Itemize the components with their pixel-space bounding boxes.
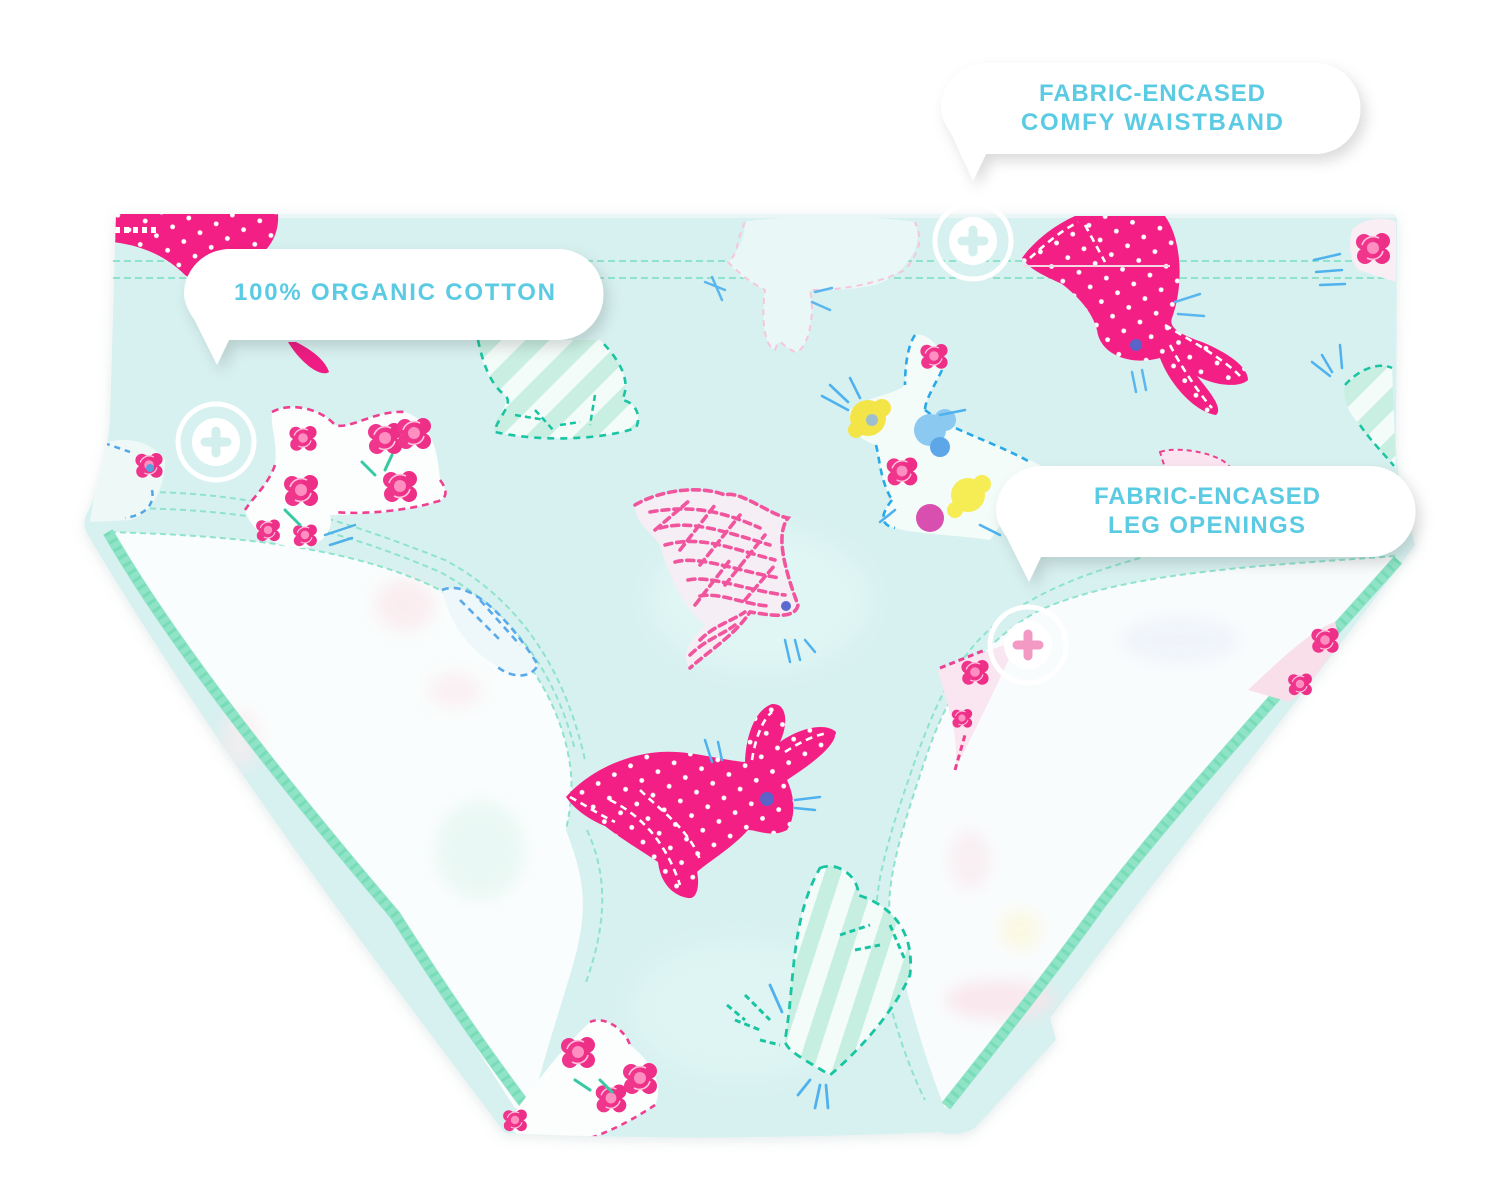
- seam texture: [108, 532, 1398, 1106]
- bunny: floral pink, inside right leg: [938, 640, 1018, 770]
- callout: fabric-encased leg openings: FABRIC-ENCASED: [1094, 483, 1320, 510]
- bunny: pink, right seam: [1248, 622, 1340, 702]
- garment base fabric: [84, 214, 1415, 1137]
- bunny: leopard, centre: [635, 490, 815, 668]
- bunny: floral, left centre: [245, 407, 445, 548]
- callout: fabric-encased leg openings: [996, 466, 1416, 582]
- bunny: floral, right centre: [822, 335, 1040, 540]
- bunny: striped, lower centre: [727, 866, 911, 1108]
- bunny: pink, centre: [566, 704, 836, 898]
- bunny: striped, upper centre: [478, 340, 638, 438]
- bunny: small, right edge top: [1314, 219, 1396, 285]
- left leg seam: [108, 532, 526, 1106]
- callout: fabric-encased comfy waistband: COMFY WAISTBAND: [1021, 109, 1283, 136]
- right leg seam: [946, 560, 1398, 1106]
- marker: leg openings: [990, 607, 1066, 683]
- marker: waistband: [935, 203, 1011, 279]
- left leg opening lining: [110, 532, 583, 1108]
- bunny: small under callout: [1160, 450, 1230, 468]
- callout: fabric-encased comfy waistband: [941, 63, 1360, 181]
- leg opening stitching: [110, 492, 1395, 1100]
- marker: organic cotton: [178, 404, 254, 480]
- waistband stitching: [113, 261, 1397, 278]
- bunny: floral, bottom centre: [503, 1020, 658, 1138]
- callout: fabric-encased comfy waistband: FABRIC-ENCASED: [1039, 80, 1265, 107]
- flower cluster: [848, 344, 991, 532]
- garment: underwear: [84, 214, 1415, 1138]
- bunny: floral blue dashes, inside left leg: [442, 588, 538, 676]
- bunny: pale, top centre: [728, 217, 919, 352]
- right leg opening lining: [889, 556, 1395, 1108]
- bunny whiskers: top centre: [705, 277, 832, 310]
- callout: 100% organic cotton: 100% ORGANIC COTTON: [234, 279, 555, 306]
- bunny: striped, right edge: [1312, 345, 1396, 468]
- fabric shading: [110, 214, 1400, 1080]
- callout: fabric-encased leg openings: LEG OPENINGS: [1108, 512, 1305, 539]
- callout: 100% organic cotton: [184, 249, 604, 365]
- bunny: pink, top left: [112, 214, 329, 373]
- bunny: pink, top right: [1022, 216, 1248, 415]
- bunny: floral, left edge: [90, 440, 165, 522]
